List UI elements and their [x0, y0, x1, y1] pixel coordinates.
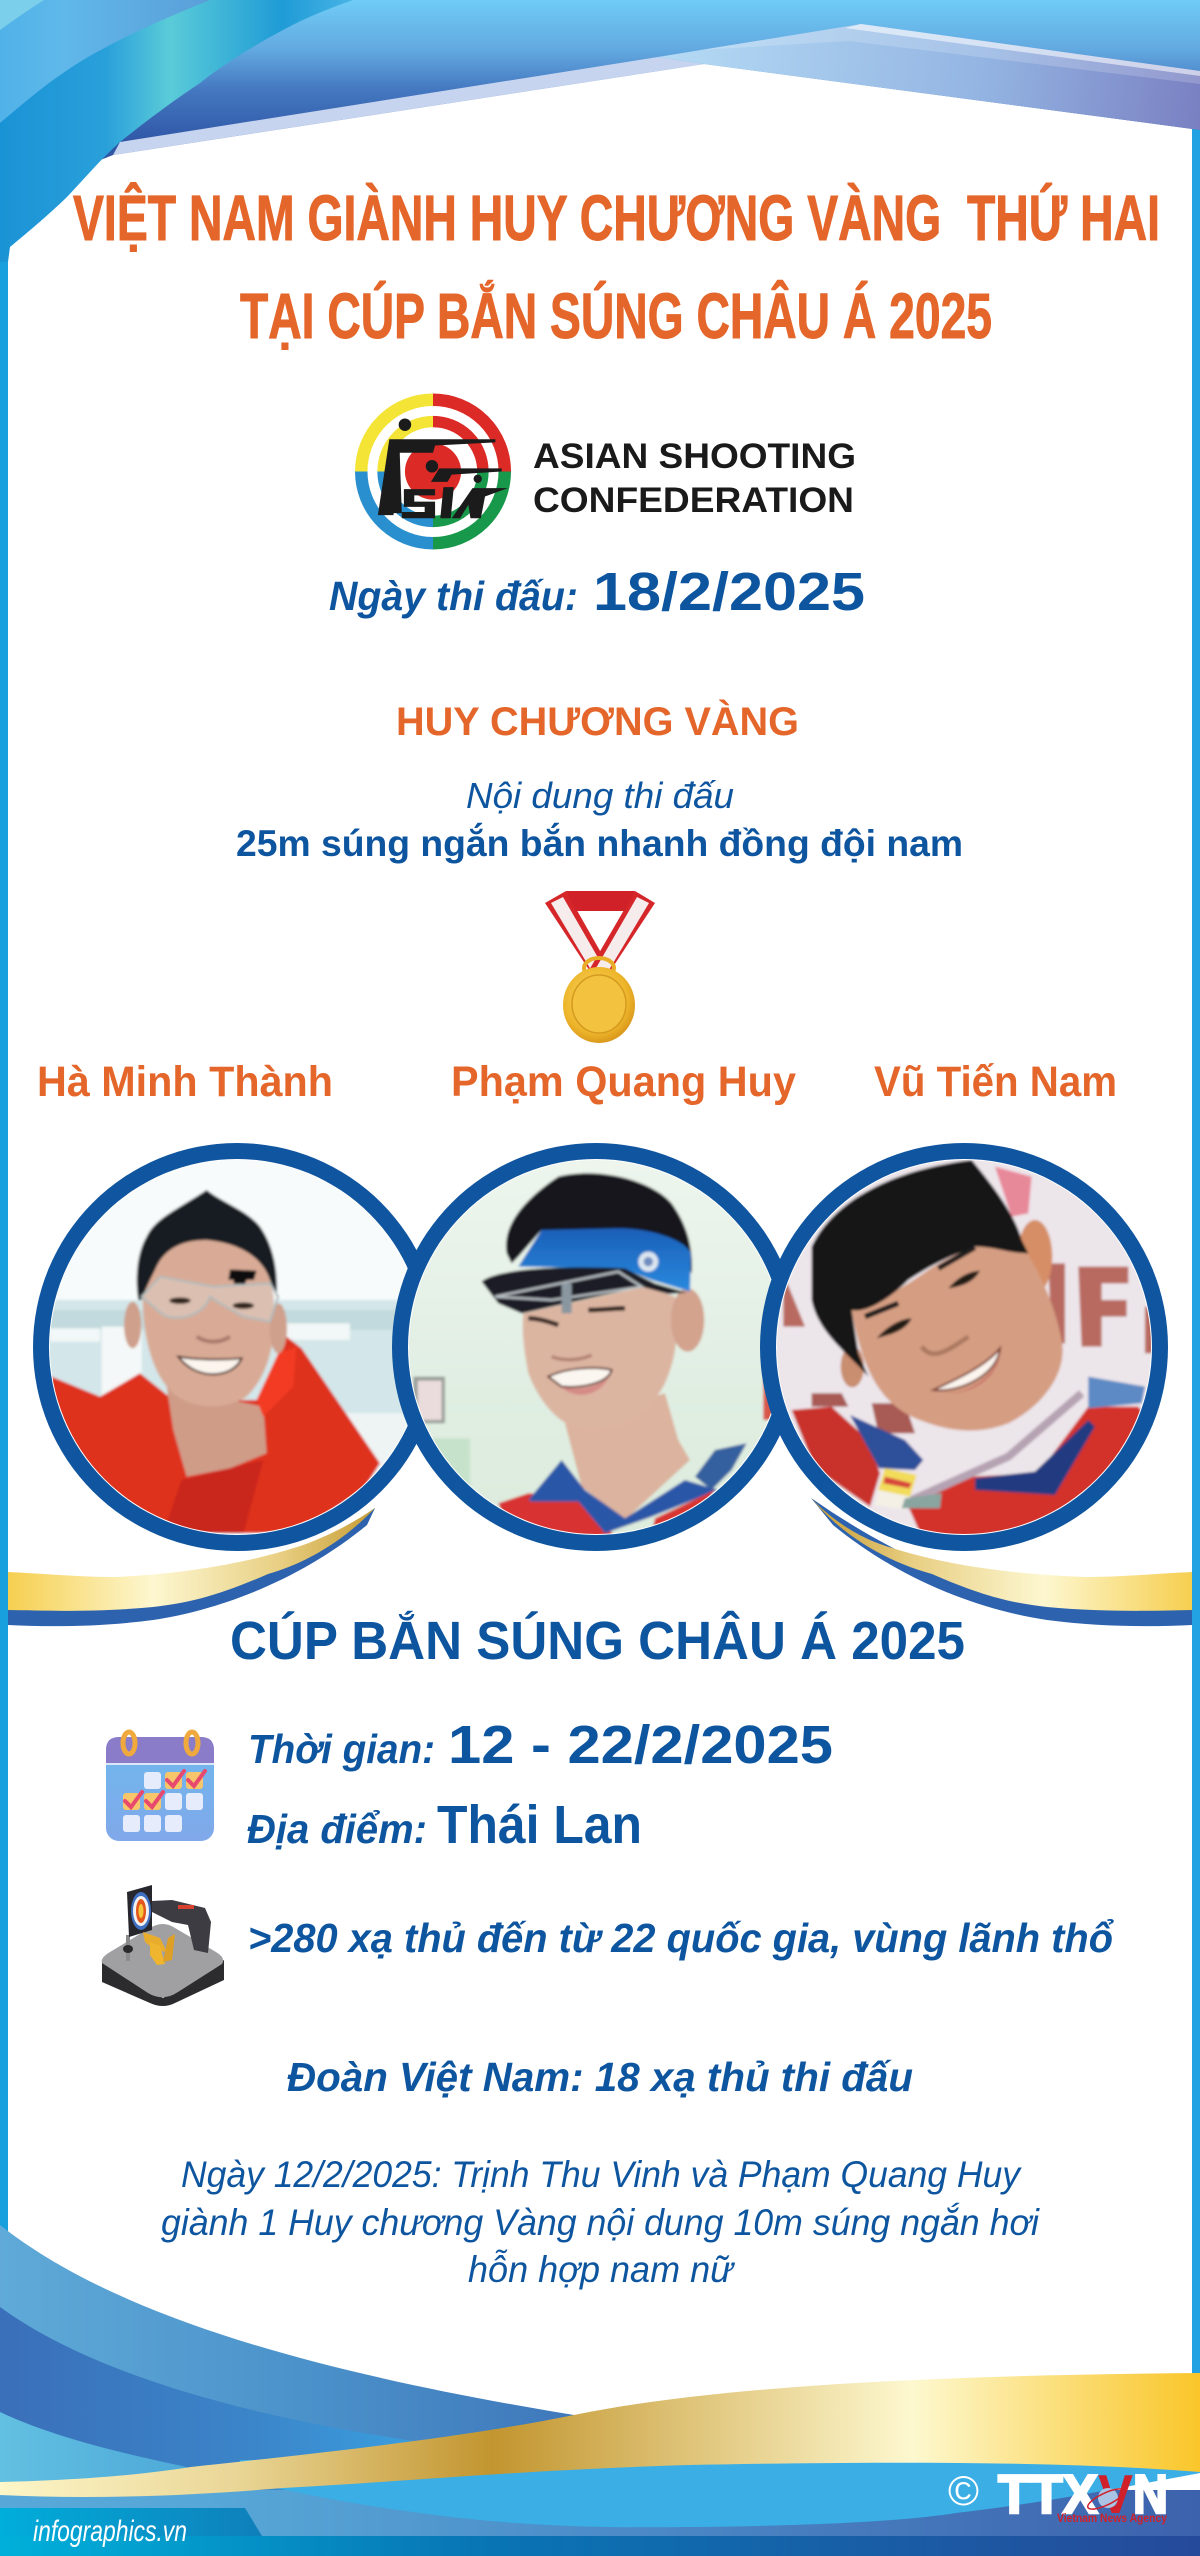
- TTXVN logo: ©: [948, 2467, 979, 2514]
- TTXVN logo: TTX: [998, 2463, 1098, 2525]
- athlete names: Vũ Tiến Nam: [874, 1058, 1117, 1106]
- logo wordmark: [533, 437, 856, 520]
- portrait: Vũ Tiến Nam: [755, 1140, 1175, 1560]
- logo: Asian Shooting Confederation: [361, 400, 856, 543]
- gold ribbon left: [8, 1508, 375, 1626]
- match date: Ngày thi đấu:: [329, 573, 578, 619]
- title: [73, 181, 1160, 352]
- note on first gold: Ngày 12/2/2025: Trịnh Thu Vinh và Phạm Quang Huy: [181, 2154, 1022, 2195]
- note on first gold: hỗn hợp nam nữ: [468, 2249, 735, 2290]
- portrait: Phạm Quang Huy: [392, 1143, 780, 1551]
- match date: [329, 562, 865, 622]
- header decorative waves: [0, 0, 1200, 262]
- Vietnam team: Đoàn Việt Nam: 18 xạ thủ thi đấu: [287, 2054, 913, 2100]
- time: 12 - 22/2/2025: [448, 1715, 833, 1775]
- gold ribbon right: [811, 1498, 1192, 1626]
- event text: Nội dung thi đấu: [466, 775, 734, 816]
- time: [248, 1715, 833, 1775]
- icon: gold medal: [545, 891, 655, 1043]
- icon: calendar: [106, 1732, 214, 1841]
- event text: 25m súng ngắn bắn nhanh đồng đội nam: [236, 822, 963, 864]
- TTXVN logo: [948, 2463, 1168, 2525]
- gold medal heading: HUY CHƯƠNG VÀNG: [396, 699, 799, 744]
- competition info: [161, 1715, 1114, 2290]
- footer site name: infographics.vn: [33, 2515, 187, 2548]
- participants: >280 xạ thủ đến từ 22 quốc gia, vùng lãnh thổ: [248, 1915, 1114, 1961]
- note on first gold: giành 1 Huy chương Vàng nội dung 10m súng ngắn hơi: [161, 2202, 1041, 2243]
- time: Thời gian:: [248, 1726, 435, 1772]
- athlete names: [37, 1058, 1117, 1106]
- footer waves: [0, 2225, 1200, 2556]
- match date: 18/2/2025: [593, 562, 865, 622]
- note on first gold: [161, 2154, 1041, 2290]
- icon: target rings and ASIA mark: [361, 400, 508, 543]
- section heading: Asian Cup: CÚP BẮN SÚNG CHÂU Á 2025: [230, 1610, 965, 1671]
- TTXVN logo: N: [1133, 2463, 1168, 2525]
- place: Thái Lan: [437, 1795, 642, 1855]
- portrait: Hà Minh Thành: [33, 1143, 416, 1551]
- TTXVN logo: V: [1098, 2463, 1133, 2525]
- icon: pistol and target: [102, 1885, 224, 2006]
- logo wordmark: ASIAN SHOOTING: [533, 437, 856, 476]
- athlete names: Phạm Quang Huy: [451, 1058, 796, 1106]
- athlete names: Hà Minh Thành: [37, 1058, 333, 1106]
- logo wordmark: CONFEDERATION: [533, 481, 854, 520]
- place: Địa điểm:: [247, 1806, 427, 1852]
- place: [247, 1795, 642, 1855]
- TTXVN logo: Vietnam News Agency: [1057, 2511, 1167, 2525]
- event text: [236, 775, 963, 864]
